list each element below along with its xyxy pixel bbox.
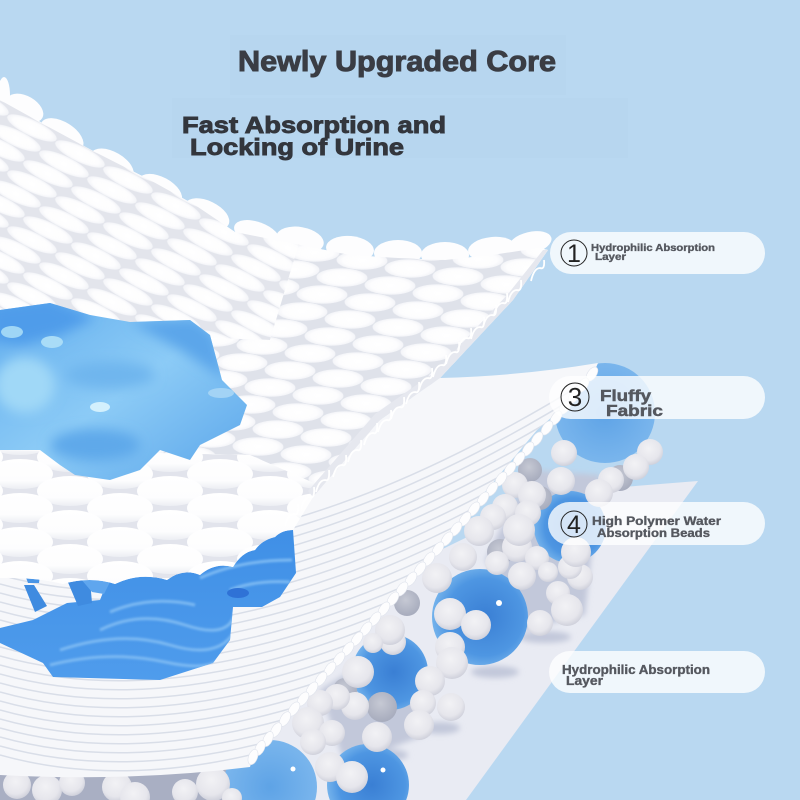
label: layer 4 <box>548 502 765 545</box>
bead shadows <box>320 470 600 765</box>
subtitle: Fast Absorption and <box>182 112 446 138</box>
gel mottling <box>0 298 226 461</box>
label: layer 3 <box>549 376 765 420</box>
label: layer 1: Hydrophilic Absorption <box>591 243 715 254</box>
label: layer 4: Absorption Beads <box>597 526 710 540</box>
label: layer 1 <box>550 232 765 274</box>
bead highlights <box>290 600 502 772</box>
label: layer 3: Fluffy <box>600 388 651 405</box>
edge domes <box>0 77 554 268</box>
label: layer 3: 3 <box>568 382 582 412</box>
title backing patch <box>230 35 566 95</box>
label: layer 3: Fabric <box>606 403 663 420</box>
label: bottom layer: Hydrophilic Absorption <box>562 663 710 677</box>
upper gel: liquid on surface <box>0 298 247 480</box>
top hydrophilic absorption sheet <box>0 77 560 600</box>
blue beads <box>223 363 655 800</box>
gel ripples <box>50 560 292 666</box>
label: layer 1: Layer <box>595 252 626 263</box>
fluffy fabric layer <box>0 360 620 777</box>
front edge shadow strip <box>308 250 548 497</box>
scalloped fabric edge <box>246 365 600 766</box>
lower gel: absorbed liquid <box>0 525 296 680</box>
bottom absorption sheet <box>200 481 698 800</box>
white beads <box>3 439 663 800</box>
far scale texture <box>0 80 300 340</box>
shadow under bottom layer <box>0 760 260 800</box>
label: layer 1: 1 <box>567 240 581 268</box>
bead cluster: water absorption beads <box>3 363 663 800</box>
label: layer 4: High Polymer Water <box>592 514 721 528</box>
title: Newly Upgraded Core <box>238 46 556 78</box>
subtitle <box>182 112 446 160</box>
subtitle: Locking of Urine <box>190 134 404 160</box>
middle scale texture <box>162 244 548 481</box>
label: layer 4: 4 <box>567 511 581 539</box>
front edge arches <box>285 260 544 526</box>
near scale texture <box>0 450 314 584</box>
label: bottom layer <box>549 651 765 693</box>
label: bottom layer: Layer <box>566 674 603 688</box>
subtitle backing patch <box>172 98 628 158</box>
